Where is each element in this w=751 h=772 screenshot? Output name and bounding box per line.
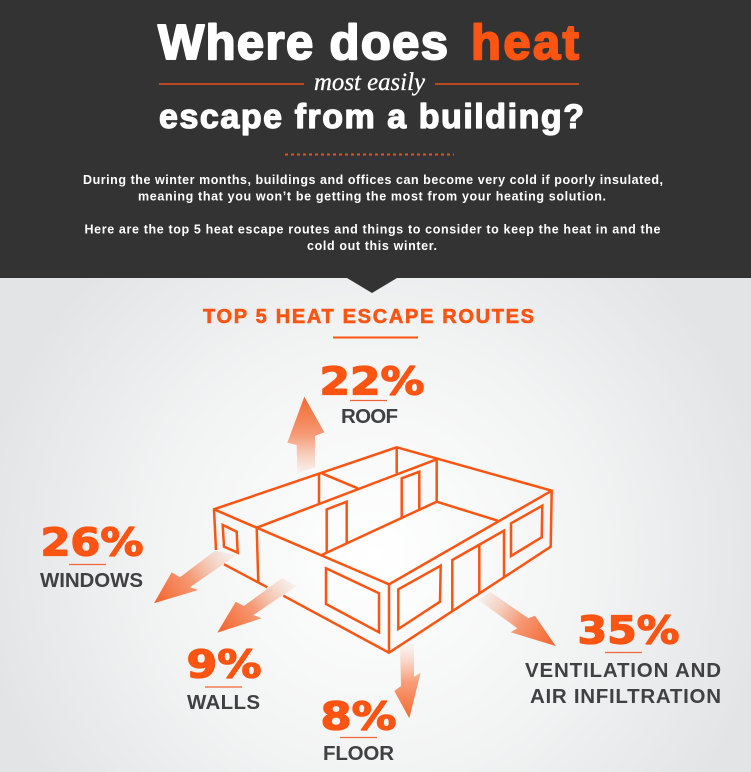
arrow: walls xyxy=(217,578,297,633)
intro text: cold out this winter. xyxy=(307,239,437,253)
door: left interior xyxy=(327,502,347,553)
stat: ventilation and air infiltration 35%: VENTILATION AND xyxy=(525,659,721,682)
title: escape from a building? xyxy=(159,98,584,136)
stat: windows 26%: 26% xyxy=(40,520,144,564)
arrow: ventilation xyxy=(478,592,556,646)
arrow: windows xyxy=(154,551,237,603)
stat: roof 22% xyxy=(320,360,424,428)
stat: roof 22%: ROOF xyxy=(341,405,398,428)
stat: ventilation and air infiltration 35% xyxy=(525,608,721,708)
title: heat xyxy=(471,16,579,70)
stat: ventilation and air infiltration 35%: AIR INFILTRATION xyxy=(530,685,721,708)
stat: walls 9%: 9% xyxy=(186,642,262,686)
double doors: front right wall xyxy=(452,531,504,611)
divider: dotted line xyxy=(285,154,454,156)
stat: floor 8% xyxy=(320,694,396,765)
stat: windows 26%: WINDOWS xyxy=(40,569,143,592)
stat: floor 8%: FLOOR xyxy=(323,742,394,765)
stat: windows 26% xyxy=(40,520,144,592)
window: front left wall xyxy=(326,568,379,632)
stat: walls 9%: WALLS xyxy=(187,691,260,714)
window: far right wall xyxy=(511,506,542,556)
door: right interior xyxy=(402,472,419,517)
stat: walls 9% xyxy=(186,642,262,714)
window: left end wall xyxy=(223,525,238,553)
heading: top 5 heat escape routes: TOP 5 HEAT ESCAPE ROUTES xyxy=(203,306,534,328)
panel: dark header xyxy=(0,0,751,293)
arrow: roof xyxy=(287,397,324,473)
intro text xyxy=(83,173,663,253)
intro text: Here are the top 5 heat escape routes and things to consider to keep the heat in and the xyxy=(84,222,661,236)
title: Where does xyxy=(158,16,448,70)
arrow: floor xyxy=(394,643,421,718)
stat: floor 8%: 8% xyxy=(320,694,396,738)
stat: roof 22%: 22% xyxy=(320,360,424,404)
panel: light background xyxy=(0,278,751,772)
stat: ventilation and air infiltration 35%: 35% xyxy=(578,608,680,652)
title xyxy=(158,16,584,136)
building illustration xyxy=(214,447,552,653)
window: front right wall xyxy=(398,566,441,629)
intro text: meaning that you won’t be getting the most from your heating solution. xyxy=(138,190,606,204)
intro text: During the winter months, buildings and offices can become very cold if poorly insulated, xyxy=(83,173,663,187)
title: most easily xyxy=(314,69,426,96)
